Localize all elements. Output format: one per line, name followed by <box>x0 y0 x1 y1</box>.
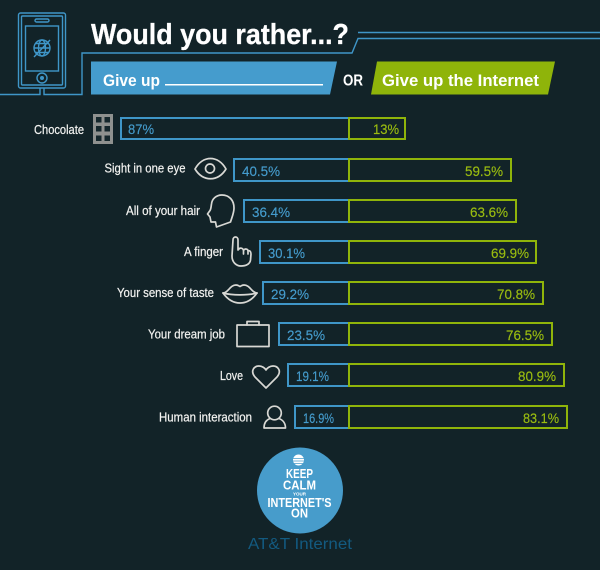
label: love: Love <box>220 369 243 383</box>
or label: OR <box>343 72 363 90</box>
bar: love 19.1 / 80.9: 19.1% <box>296 368 329 384</box>
banner: give up the internet <box>371 62 555 94</box>
bar: sight 40.5 / 59.5: 59.5% <box>465 163 503 179</box>
icon: smartphone with crossed-out globe <box>0 13 600 94</box>
icon: person <box>264 406 286 428</box>
row: human interaction <box>159 406 567 428</box>
badge: keep calm: YOUR <box>293 492 307 497</box>
bar: finger 30.1 / 69.9: 30.1% <box>268 245 305 261</box>
bar: chocolate 87 / 13 <box>121 118 405 139</box>
icon: eye <box>195 158 226 179</box>
bar: human 16.9 / 83.1: 83.1% <box>523 410 559 426</box>
label: dream job: Your dream job <box>148 328 225 342</box>
bar: finger 30.1 / 69.9: 69.9% <box>491 245 529 261</box>
bar: human 16.9 / 83.1: 16.9% <box>303 410 334 426</box>
bar: hair 36.4 / 63.6: 36.4% <box>252 204 290 220</box>
label: human interaction: Human interaction <box>159 410 252 424</box>
row: hair <box>126 195 516 227</box>
title: Would you rather...? <box>91 19 349 51</box>
row: taste <box>117 282 543 304</box>
icon: head <box>208 195 234 227</box>
bar: chocolate 87 / 13: 87% <box>128 121 154 137</box>
badge: keep calm: INTERNET'S <box>268 496 332 510</box>
bar: taste 29.2 / 70.8: 29.2% <box>271 286 309 302</box>
icon: at&t globe <box>293 454 304 466</box>
label: finger: A finger <box>184 245 223 259</box>
icon: heart <box>253 366 279 388</box>
icon: briefcase <box>237 322 269 346</box>
bar: sight 40.5 / 59.5 <box>234 159 511 181</box>
label: hair: All of your hair <box>126 204 200 218</box>
bar: hair 36.4 / 63.6 <box>244 200 516 222</box>
icon: pointing hand <box>232 237 251 266</box>
bar: taste 29.2 / 70.8 <box>263 282 543 304</box>
bar: chocolate 87 / 13: 13% <box>373 121 399 137</box>
label: chocolate: Chocolate <box>34 123 84 137</box>
bar: hair 36.4 / 63.6: 63.6% <box>470 204 508 220</box>
bar: human 16.9 / 83.1 <box>295 406 567 428</box>
label: taste: Your sense of taste <box>117 286 214 300</box>
row: dream job <box>148 322 552 346</box>
bar: job 23.5 / 76.5: 76.5% <box>506 327 544 343</box>
bar: taste 29.2 / 70.8: 70.8% <box>497 286 535 302</box>
bar: job 23.5 / 76.5: 23.5% <box>287 327 325 343</box>
bar: job 23.5 / 76.5 <box>279 323 552 345</box>
brand: at&t internet: AT&T Internet <box>248 536 353 553</box>
banner: give up <box>91 62 337 94</box>
bar: sight 40.5 / 59.5: 40.5% <box>242 163 280 179</box>
label: sight: Sight in one eye <box>104 162 186 176</box>
row: chocolate <box>34 114 405 144</box>
badge: keep calm: ON <box>291 506 308 520</box>
row: love <box>220 364 564 388</box>
bar: love 19.1 / 80.9: 80.9% <box>518 368 556 384</box>
bar: finger 30.1 / 69.9 <box>260 241 536 263</box>
badge: keep calm <box>257 448 343 534</box>
badge: keep calm: CALM <box>283 478 316 492</box>
badge: keep calm: KEEP <box>286 467 313 481</box>
bar: love 19.1 / 80.9 <box>288 364 564 386</box>
banner: give up: Give up <box>103 71 160 90</box>
icon: chocolate bar <box>93 114 113 144</box>
row: finger <box>184 237 536 266</box>
row: sight <box>104 158 511 181</box>
banner: give up the internet: Give up the Internet <box>382 71 539 90</box>
icon: lips <box>223 285 257 303</box>
